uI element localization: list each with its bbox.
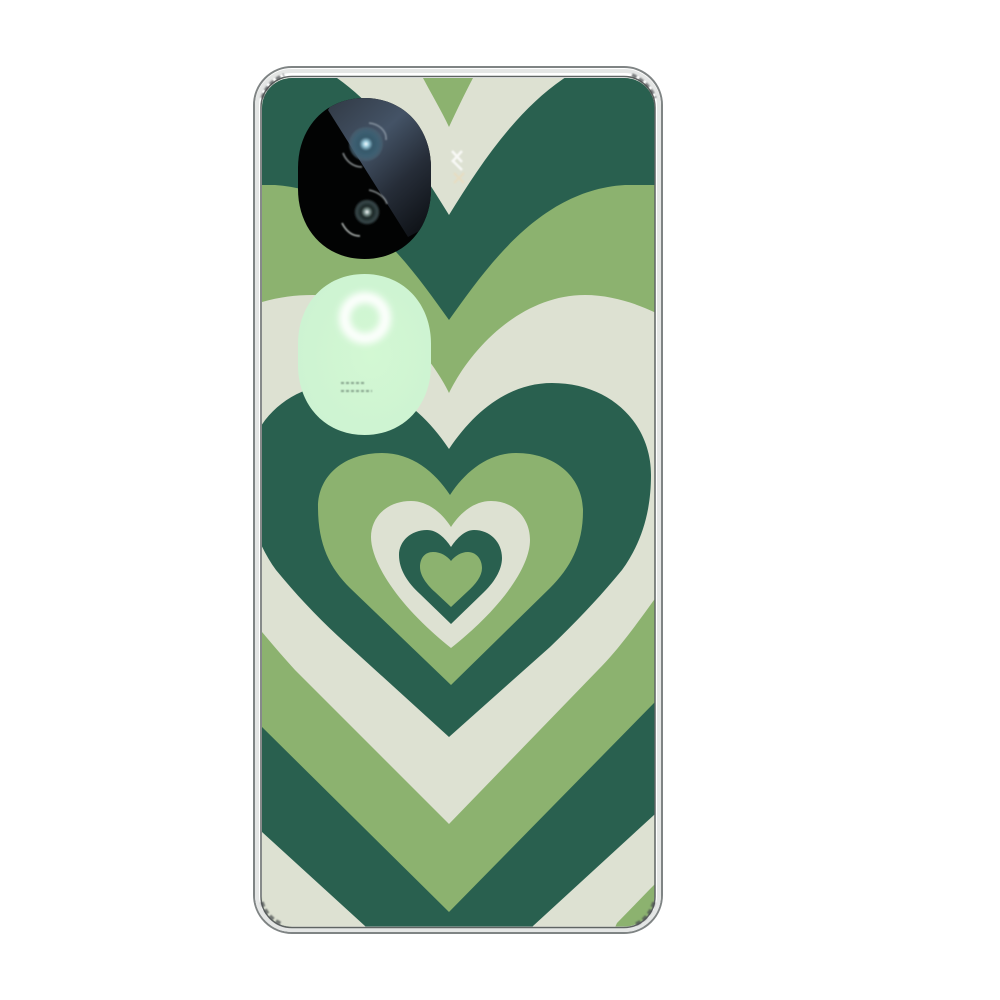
glowing ring	[344, 298, 386, 338]
heart band: middle cream	[262, 295, 654, 824]
heart band: outer cream	[262, 78, 654, 926]
light green oval module	[298, 274, 431, 435]
heart band: large dark green	[247, 383, 651, 737]
heart band: small cream	[371, 501, 530, 648]
camera glass reflection	[328, 98, 431, 237]
heart band: outer light green	[262, 185, 654, 912]
camera module	[298, 98, 431, 259]
small decal mark	[452, 151, 464, 183]
heart band: outer dark green	[262, 78, 654, 926]
lower lens	[342, 190, 387, 236]
transparent case frame	[254, 67, 662, 933]
phone case illustration	[253, 66, 663, 934]
small print marks	[341, 383, 372, 391]
panel: heart pattern back	[262, 78, 654, 926]
upper lens	[343, 123, 386, 167]
case corner bumpers	[262, 75, 655, 924]
heart band: small dark green	[399, 530, 502, 624]
heart band: medium light green	[318, 453, 583, 685]
heart band: innermost light green	[420, 552, 482, 607]
